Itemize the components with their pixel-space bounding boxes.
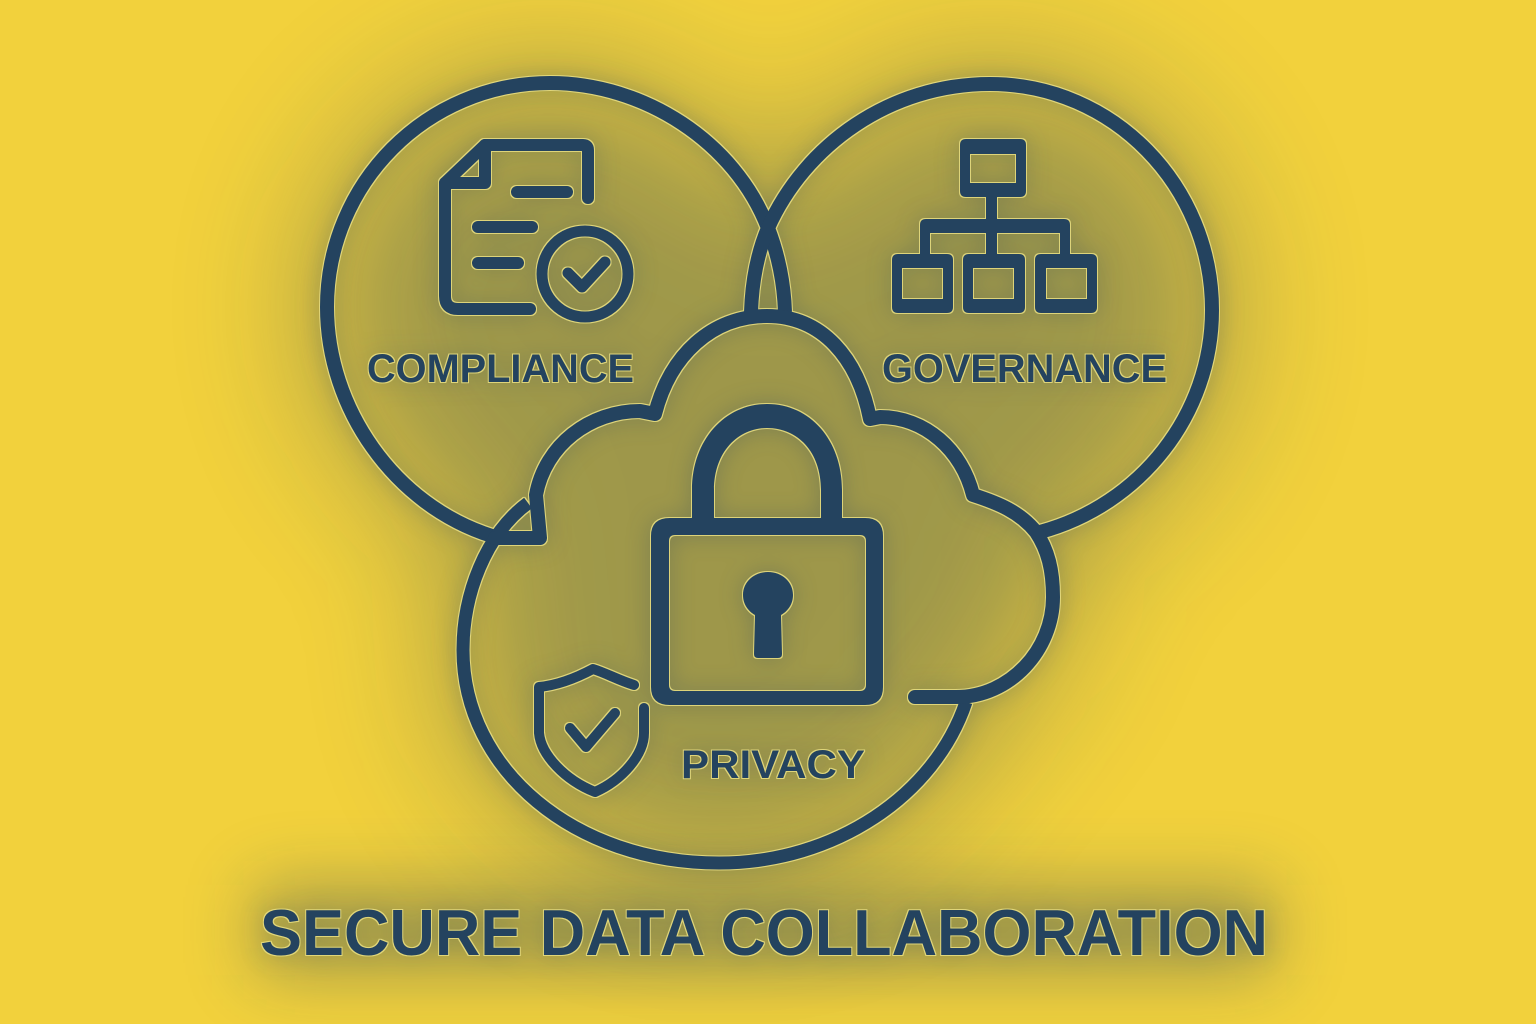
label: governance: GOVERNANCE bbox=[882, 347, 1167, 391]
label: compliance: COMPLIANCE bbox=[367, 347, 634, 391]
circle: privacy bbox=[463, 503, 966, 863]
title: SECURE DATA COLLABORATION bbox=[260, 896, 1268, 969]
diagram artwork bbox=[260, 83, 1268, 969]
soft shadow glow bbox=[315, 72, 1225, 880]
icon: compliance document bbox=[445, 145, 628, 317]
circle: governance bbox=[751, 84, 1212, 532]
cloud outline bbox=[495, 316, 1053, 697]
title shadow band bbox=[255, 885, 1275, 975]
icon: shield with check bbox=[539, 669, 644, 792]
icon: governance org chart bbox=[892, 139, 1097, 313]
circle: compliance bbox=[327, 83, 785, 536]
icon: padlock bbox=[651, 404, 883, 705]
label: privacy: PRIVACY bbox=[681, 743, 865, 787]
